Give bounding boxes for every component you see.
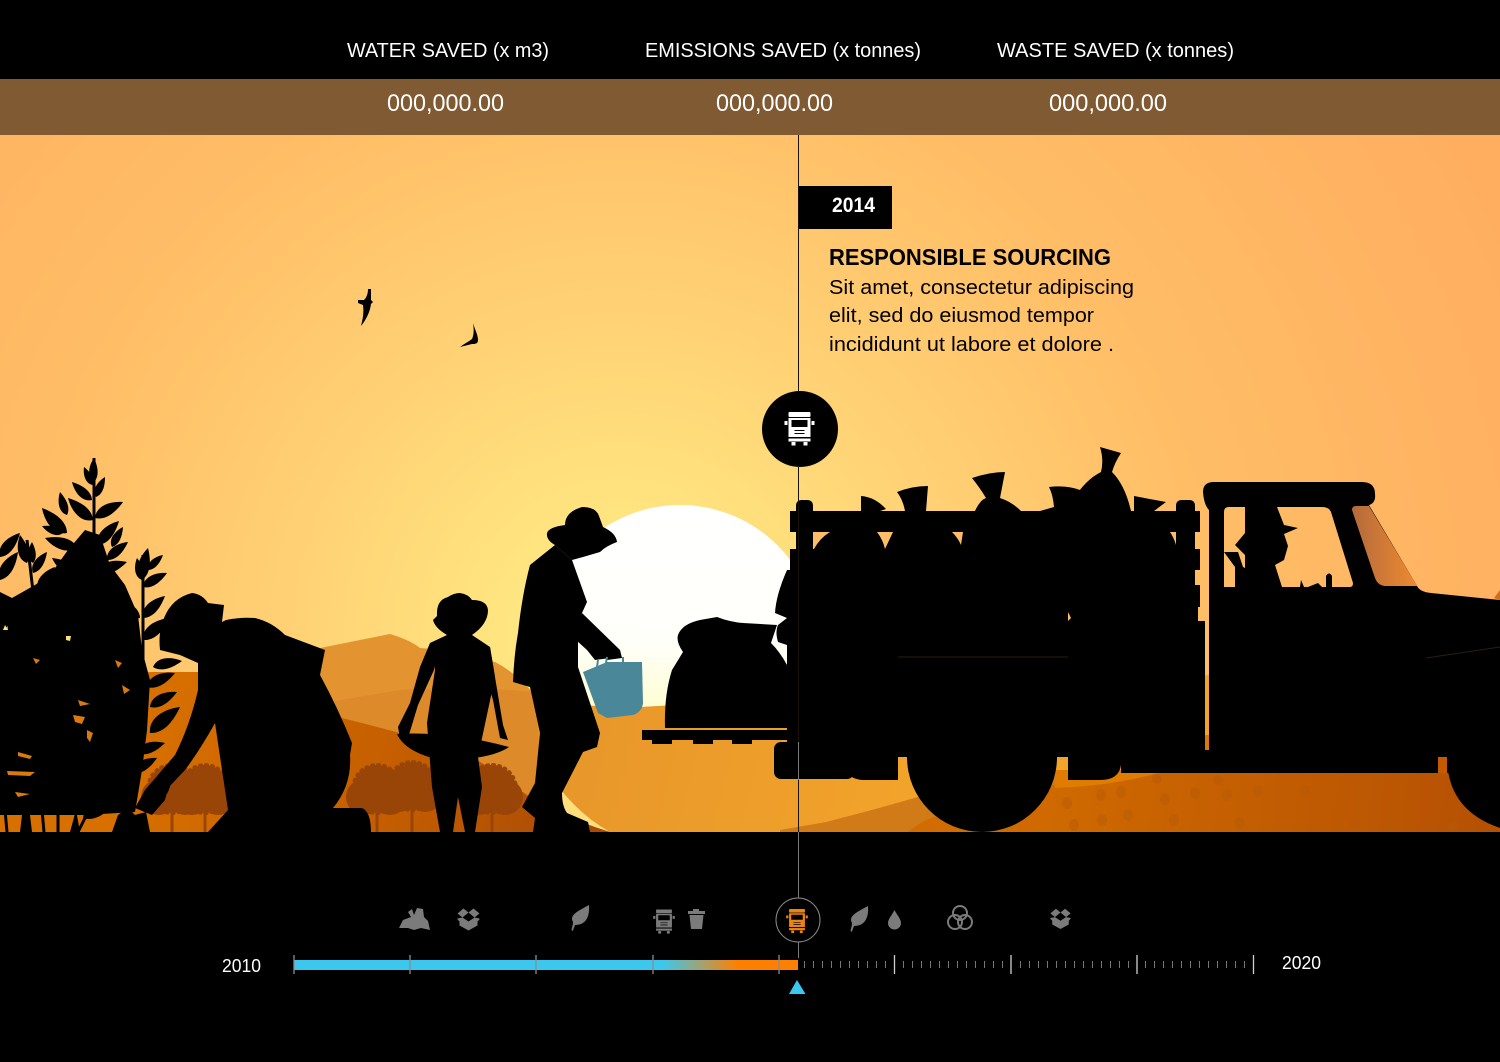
major ticks (294, 955, 779, 974)
child right arm (484, 647, 508, 740)
value: emissions saved: 000,000.00 (716, 90, 833, 117)
woman body and skirt (513, 545, 600, 832)
rear bumper (774, 742, 854, 779)
end year: 2020 (1282, 953, 1321, 973)
person: crouching planter (112, 593, 371, 832)
cab (1121, 482, 1500, 773)
arch gap (1438, 757, 1447, 773)
tree (174, 765, 236, 836)
icon: leaf (850, 906, 868, 932)
value: waste saved: 000,000.00 (1049, 90, 1167, 117)
icon: bin (688, 909, 705, 929)
future ticks (894, 955, 1254, 974)
icon: people (399, 908, 430, 930)
tree (346, 765, 408, 836)
woven tray (397, 734, 509, 760)
bird 1 (358, 289, 373, 326)
middle hill (290, 688, 570, 832)
year flag (799, 186, 892, 229)
icon: overlapping circles (948, 906, 972, 929)
dune spots (1062, 774, 1458, 831)
foreground dune (536, 675, 1209, 832)
teal basket (583, 662, 643, 718)
icon: active truck marker (776, 898, 820, 942)
woman arms (576, 613, 622, 660)
start year: 2010 (222, 956, 261, 976)
tree (461, 765, 523, 836)
ground band (0, 832, 1500, 1062)
heading: RESPONSIBLE SOURCING (829, 244, 1111, 270)
body copy: Sit amet, consectetur adipiscing (829, 277, 1134, 299)
icon: box (458, 908, 480, 930)
timeline scale (222, 953, 1321, 994)
person: woman with basket (513, 507, 643, 832)
body copy: incididunt ut labore et dolore . (829, 334, 1114, 356)
distant hill right (1494, 590, 1500, 600)
child left arm (398, 643, 436, 738)
hood seam line (1426, 647, 1500, 658)
cursor line on black (798, 742, 800, 958)
gap line colours behind truck (1205, 735, 1209, 755)
basket handle (597, 657, 623, 667)
woman hat (547, 507, 617, 560)
body copy: elit, sed do eiusmod tempor (829, 305, 1094, 327)
steering wheel and hands (1300, 574, 1332, 587)
driver (1224, 507, 1298, 587)
loaded truck bed with sacks (775, 447, 1205, 757)
bird 2 (460, 323, 478, 347)
tree (141, 765, 203, 836)
icon: box (1050, 909, 1071, 929)
minor ticks (804, 961, 1244, 968)
timeline cursor line on sky (798, 135, 800, 832)
rear fenders (845, 750, 1121, 780)
statistic values band (0, 79, 1500, 135)
tree (381, 762, 443, 833)
timeline icons (399, 905, 1071, 934)
label: emissions saved: EMISSIONS SAVED (x tonnes) (645, 39, 921, 62)
statistic labels (347, 39, 1234, 62)
progress bar (294, 960, 798, 970)
windshield (1352, 506, 1417, 586)
seedling (112, 808, 150, 832)
far hill (290, 634, 535, 832)
label: water saved: WATER SAVED (x m3) (347, 39, 549, 62)
deep orange dune (908, 770, 1500, 832)
sun (542, 505, 818, 781)
top header strip (0, 0, 1500, 79)
statistic values (387, 90, 1167, 117)
person: child carrying tray (397, 593, 509, 832)
icon: water drop (888, 910, 901, 930)
year label: 2014 (832, 194, 875, 217)
current position arrow (789, 980, 806, 994)
birds (358, 289, 478, 347)
plant gaps (5, 626, 130, 797)
leafy plant silhouette (0, 458, 184, 832)
label: waste saved: WASTE SAVED (x tonnes) (997, 39, 1234, 62)
icon: truck (653, 909, 675, 934)
rear wheel (907, 750, 1057, 832)
truck silhouette (774, 447, 1500, 832)
sky background (0, 135, 1500, 832)
landscape hills (0, 590, 1500, 832)
mid dune (780, 770, 1209, 832)
near brown hill (0, 672, 610, 832)
front wheel (1447, 750, 1500, 828)
bed seam line (898, 656, 1068, 658)
sliver gap (1068, 612, 1071, 621)
bed gaps between rails (813, 532, 1176, 549)
body copy (829, 277, 1134, 356)
background trees (141, 762, 523, 836)
value: water saved: 000,000.00 (387, 90, 504, 117)
icon: leaf (572, 905, 589, 931)
sack on pallet (642, 617, 798, 744)
milestone text (829, 244, 1134, 356)
pallet (642, 730, 798, 744)
child hat and head (433, 593, 488, 635)
icon: truck badge (762, 391, 838, 467)
dune highlight (1055, 770, 1159, 788)
sack (665, 617, 792, 728)
child body (427, 635, 495, 832)
